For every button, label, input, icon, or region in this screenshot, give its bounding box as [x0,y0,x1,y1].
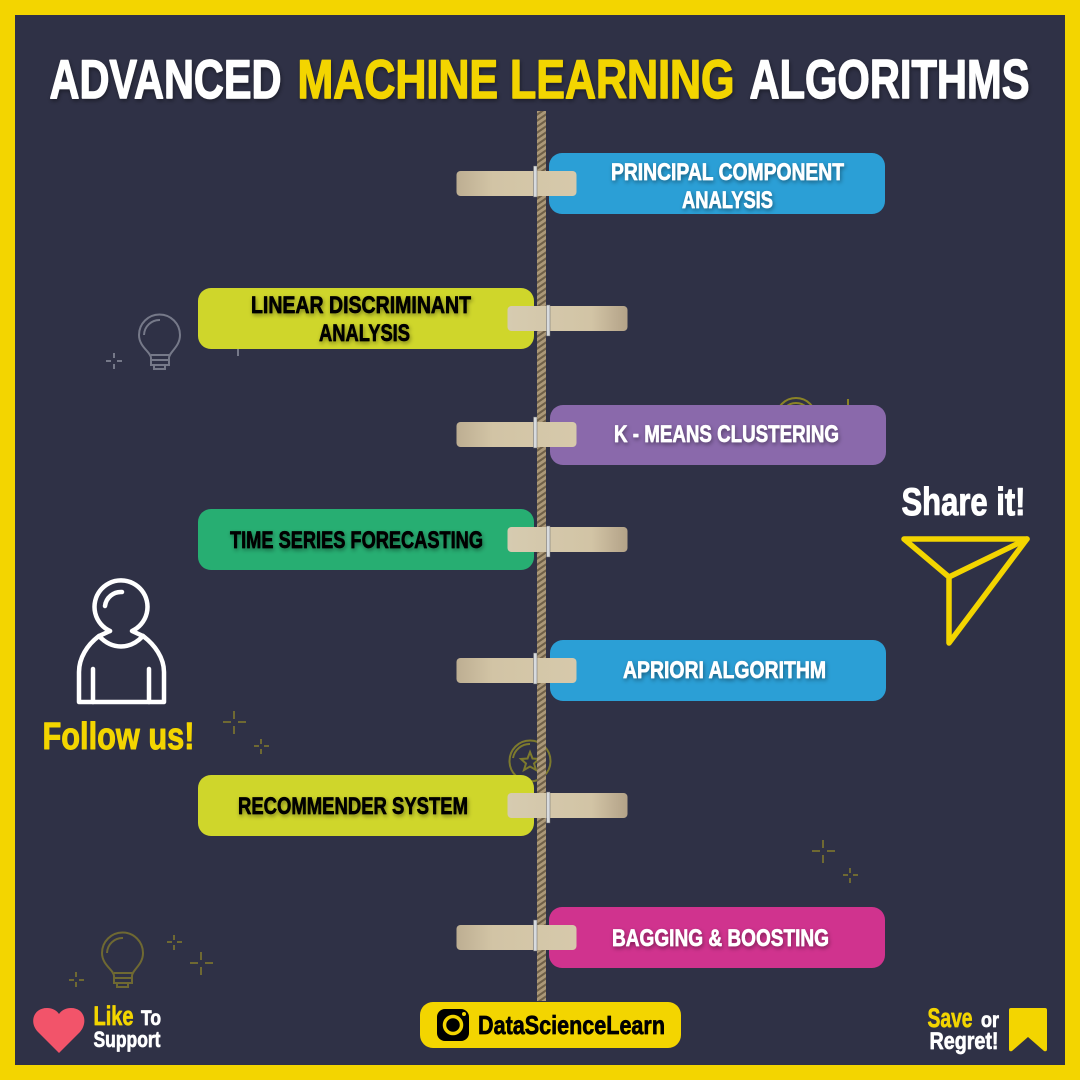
title [50,48,1030,110]
card: Linear Discriminant Analysis: LINEAR DISCRIMINANT [251,292,471,319]
decorative sparkles [69,711,858,987]
icon: person [79,580,164,702]
icon: paper plane [904,539,1027,643]
instagram handle pill: DataScienceLearn [478,1010,665,1040]
card: Time Series Forecasting: TIME SERIES FORECASTING [230,527,483,554]
save or regret text: Save [928,1003,972,1033]
like to support text: Support [94,1027,161,1052]
card: Time Series Forecasting [198,509,628,570]
decorative icon: badge behind purple card [776,398,886,438]
follow us label: Follow us! [42,716,194,758]
card: Linear Discriminant Analysis: ANALYSIS [319,320,410,347]
card: Bagging and Boosting [456,907,885,968]
decorative icon: light bulb olive [102,932,143,987]
instagram handle pill [420,1002,681,1048]
card: Principal Component Analysis [456,153,885,214]
like to support text: To [141,1007,161,1030]
title: ADVANCED [50,48,282,110]
card: Recommender System [198,775,628,836]
icon: instagram [437,1009,469,1041]
card: Principal Component Analysis: ANALYSIS [682,187,773,214]
card: K-Means Clustering: K - MEANS CLUSTERING [614,421,839,448]
title: MACHINE LEARNING [298,48,734,110]
like to support text: Like [94,1001,134,1031]
share it label: Share it! [902,481,1026,524]
card: Bagging and Boosting: BAGGING & BOOSTING [612,925,829,952]
icon: heart [33,1008,84,1053]
card: K-Means Clustering [456,405,886,465]
like to support text [94,1001,161,1052]
card: Apriori Algorithm: APRIORI ALGORITHM [623,657,826,684]
card: Apriori Algorithm [456,640,886,701]
save or regret text: Regret! [930,1028,998,1055]
save or regret text [928,1003,999,1055]
card: Principal Component Analysis: PRINCIPAL COMPONENT [611,159,844,186]
save or regret text: or [981,1009,999,1032]
card: Linear Discriminant Analysis [198,288,628,349]
decorative icon: light bulb grey [106,314,238,369]
card: Recommender System: RECOMMENDER SYSTEM [238,793,468,820]
rope [537,111,546,1001]
decorative icon: star badge [510,740,550,782]
icon: bookmark [1009,1008,1047,1051]
